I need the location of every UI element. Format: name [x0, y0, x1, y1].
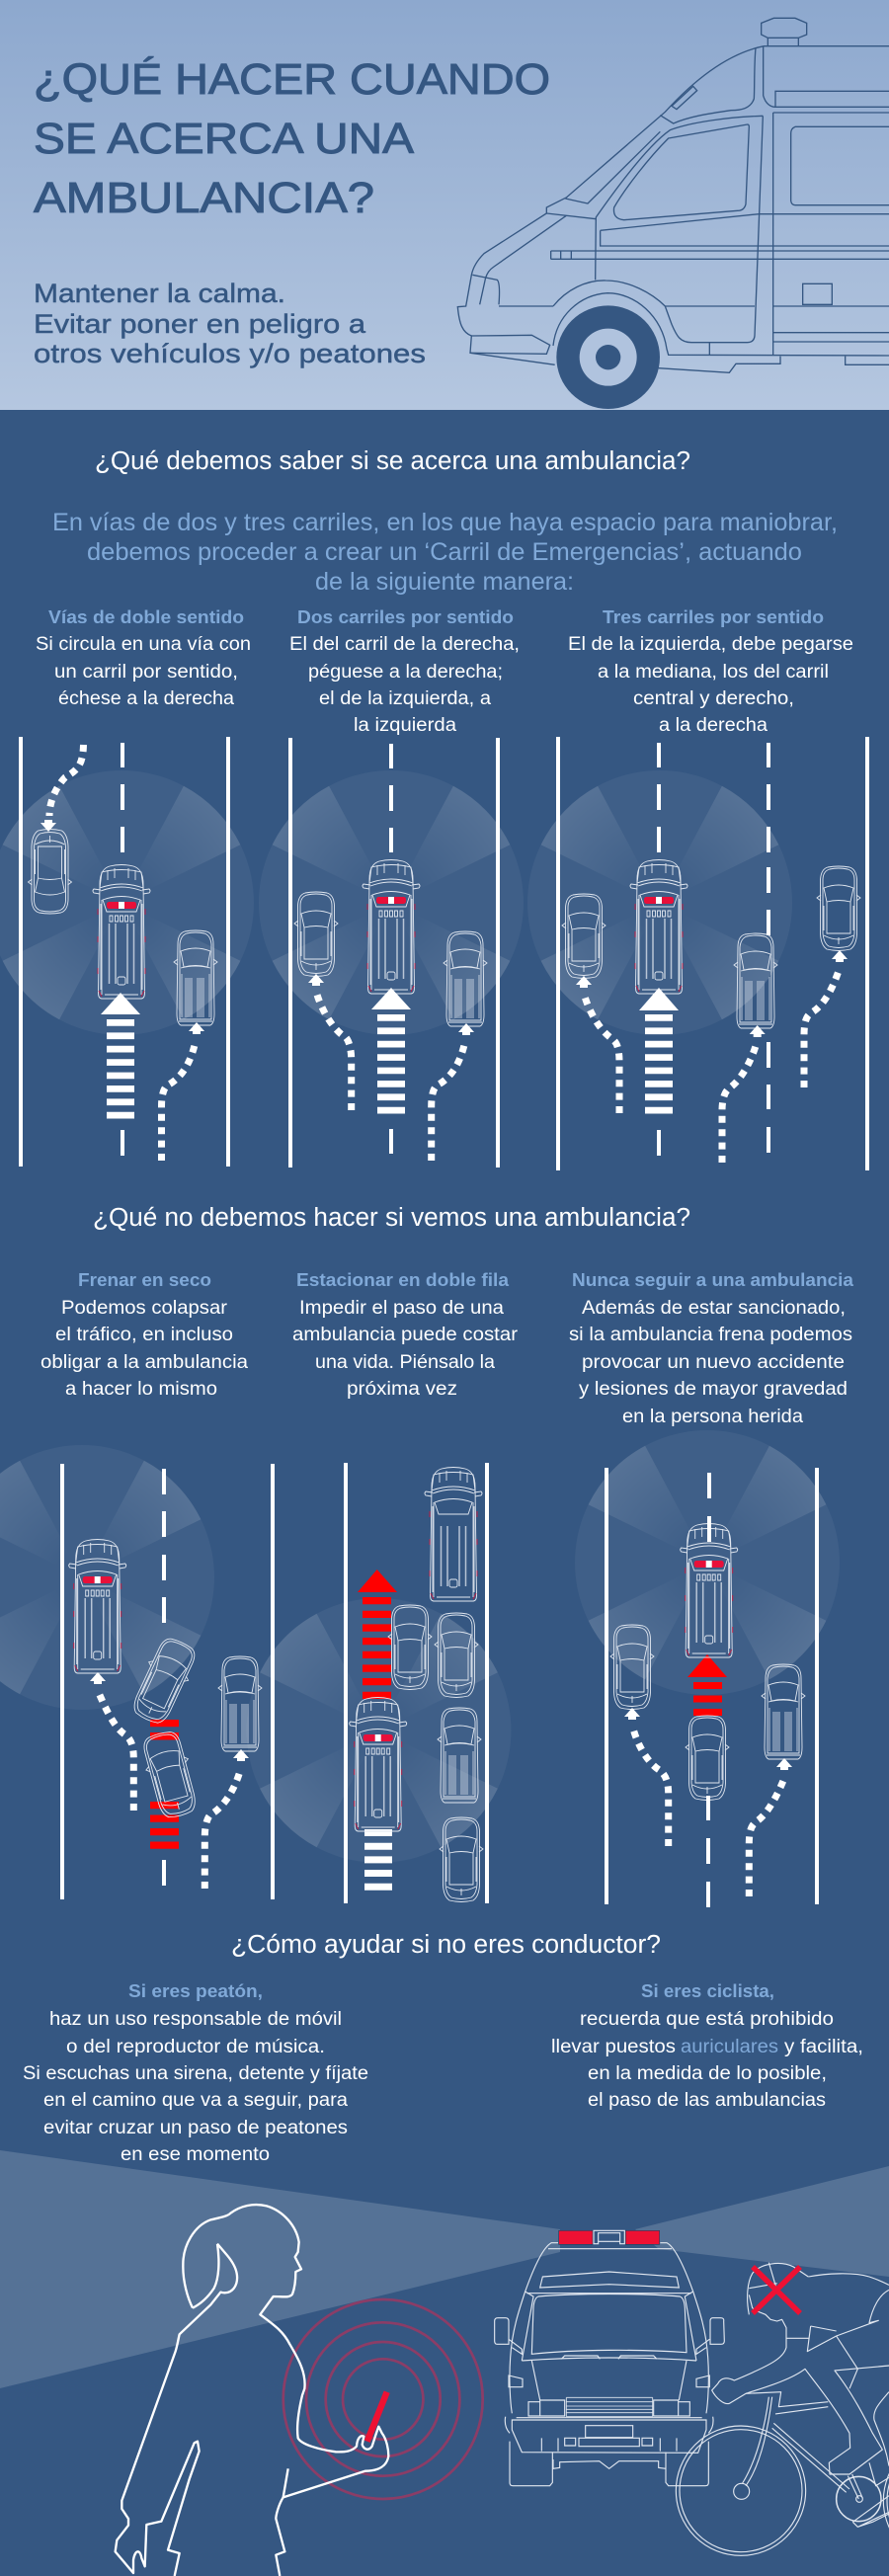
ambulance	[363, 859, 420, 994]
pickup	[218, 1656, 262, 1751]
text: si eres peatón: en ese momento	[121, 2144, 270, 2165]
text: si eres ciclista: en la medida de lo posible,	[588, 2063, 827, 2084]
dotted path right	[204, 1771, 240, 1889]
dotted path right	[749, 1779, 784, 1896]
heading: qué no debemos hacer: ¿Qué no debemos hacer si vemos una ambulancia?	[93, 1204, 690, 1232]
arrow tip	[624, 1708, 640, 1720]
arrow tip	[458, 1023, 474, 1035]
siren glow	[0, 770, 254, 1035]
hatchback left	[610, 1625, 654, 1709]
dotted path left	[49, 745, 83, 816]
diagram: nunca seguir a una ambulancia	[575, 1430, 840, 1907]
text: tres carriles por sentido	[568, 606, 853, 736]
text: frenar en seco: a hacer lo mismo	[65, 1379, 217, 1400]
text: si eres peatón: en el camino que va a seguir, para	[43, 2090, 348, 2111]
arrow tip	[776, 1758, 792, 1770]
subtitle	[34, 279, 426, 368]
diagram: three lanes	[527, 737, 867, 1170]
car moving aside	[28, 830, 71, 914]
text: dos carriles por sentido	[289, 606, 520, 736]
heading: qué debemos saber: ¿Qué debemos saber si se acerca una ambulancia?	[95, 447, 690, 475]
parked van	[425, 1468, 482, 1601]
intro paragraph: de la siguiente manera:	[315, 568, 574, 596]
text: frenar en seco: el tráfico, en incluso	[55, 1325, 233, 1345]
panel: header banner	[0, 0, 889, 410]
dotted path left	[99, 1693, 133, 1811]
text: frenar en seco: obligar a la ambulancia	[40, 1352, 248, 1373]
text: vías de doble sentido: Vías de doble sentido	[48, 606, 244, 627]
text: nunca seguir a una ambulancia: provocar un nuevo accidente	[582, 1352, 845, 1373]
red stripes	[150, 1720, 179, 1849]
text: estacionar en doble fila	[292, 1269, 519, 1400]
arrow tip	[40, 820, 56, 832]
dotted path left	[317, 995, 352, 1110]
text: si eres peatón: o del reproductor de música.	[66, 2037, 325, 2057]
text: si eres ciclista: Si eres ciclista,	[641, 1980, 774, 2001]
text: vías de doble sentido: un carril por sentido,	[54, 662, 238, 683]
icon: side view ambulance	[457, 18, 889, 409]
text: si eres peatón	[23, 1980, 368, 2165]
text: si eres ciclista: llevar puestos	[551, 2037, 676, 2057]
text: si eres ciclista: auriculares	[681, 2037, 778, 2057]
arrow tip	[90, 1672, 106, 1684]
arrow tip	[308, 974, 324, 986]
title: AMBULANCIA?	[34, 174, 374, 222]
text: si eres peatón: Si escuchas una sirena, detente y fíjate	[23, 2063, 368, 2084]
hatchback right	[817, 866, 860, 950]
icon: pedestrian outline	[116, 2205, 388, 2576]
pickup	[762, 1664, 805, 1759]
parked car	[440, 1817, 483, 1902]
text: si eres ciclista: el paso de las ambulancias	[588, 2090, 826, 2111]
diagram: two lanes	[259, 738, 524, 1167]
title	[34, 55, 550, 222]
arrow tip	[832, 950, 848, 962]
arrow tip	[576, 976, 592, 988]
text: nunca seguir a una ambulancia: y lesiones de mayor gravedad	[579, 1379, 848, 1400]
ambulance	[630, 859, 687, 994]
ambulance	[69, 1539, 126, 1673]
text: nunca seguir a una ambulancia: en la persona herida	[622, 1407, 803, 1427]
dotted path right	[432, 1043, 464, 1161]
diagram: estacionar en doble fila	[247, 1463, 512, 1903]
big arrow	[639, 988, 679, 1114]
text: dos carriles por sentido: Dos carriles por sentido	[297, 606, 514, 627]
text: tres carriles por sentido: a la mediana, los del carril	[598, 662, 829, 683]
icon: phone signal rings	[283, 2299, 483, 2499]
pickup	[174, 930, 217, 1025]
light beam left	[0, 2150, 560, 2388]
pickup	[444, 931, 487, 1026]
braking car	[138, 1729, 202, 1821]
icon: crossed out headphones	[753, 2267, 800, 2313]
text: frenar en seco: Frenar en seco	[78, 1269, 211, 1290]
dotted path right	[162, 1043, 196, 1161]
text: nunca seguir a una ambulancia	[569, 1269, 854, 1427]
text: estacionar en doble fila: ambulancia puede costar	[292, 1325, 519, 1345]
text: tres carriles por sentido: Tres carriles por sentido	[603, 606, 824, 627]
text: si eres peatón: Si eres peatón,	[128, 1980, 263, 2001]
dotted path middle	[722, 1046, 756, 1163]
ambulance	[93, 865, 150, 999]
siren glow	[247, 1598, 512, 1863]
siren glow	[527, 770, 792, 1035]
dotted path left	[633, 1729, 669, 1846]
intro paragraph	[52, 509, 838, 596]
parked car	[435, 1613, 478, 1697]
text: nunca seguir a una ambulancia: Además de estar sancionado,	[582, 1298, 846, 1319]
title: ¿QUÉ HACER CUANDO	[34, 55, 550, 104]
text: nunca seguir a una ambulancia: si la ambulancia frena podemos	[569, 1325, 852, 1345]
text: si eres peatón: haz un uso responsable de móvil	[49, 2009, 342, 2030]
icon: cyclist outline	[676, 2263, 889, 2565]
pickup	[734, 933, 777, 1028]
text: si eres peatón: evitar cruzar un paso de peatones	[43, 2118, 348, 2138]
red arrow	[358, 1570, 397, 1699]
subtitle: otros vehículos y/o peatones	[34, 339, 426, 368]
red arrow	[687, 1654, 727, 1716]
text: tres carriles por sentido: a la derecha	[659, 715, 768, 736]
siren glow	[259, 770, 524, 1035]
text: si eres ciclista: y facilita,	[784, 2037, 863, 2057]
intro paragraph: debemos proceder a crear un ‘Carril de Emergencias’, actuando	[87, 538, 802, 566]
diagram: single lane each way	[0, 737, 254, 1167]
icon: front view ambulance	[495, 2230, 724, 2486]
icon: phone	[367, 2392, 387, 2442]
hatchback	[294, 892, 338, 976]
text: dos carriles por sentido: El del carril de la derecha,	[289, 634, 520, 655]
text: vías de doble sentido: Si circula en una vía con	[36, 634, 251, 655]
text: dos carriles por sentido: el de la izquierda, a	[319, 688, 491, 709]
ambulance	[681, 1523, 738, 1657]
text: frenar en seco: Podemos colapsar	[61, 1298, 228, 1319]
subtitle: Mantener la calma.	[34, 279, 285, 308]
subtitle: Evitar poner en peligro a	[34, 309, 366, 339]
text: si eres ciclista	[551, 1980, 863, 2111]
text: estacionar en doble fila: Impedir el paso de una	[299, 1298, 504, 1319]
arrow tip	[189, 1022, 204, 1034]
parked pickup	[438, 1708, 481, 1803]
text: dos carriles por sentido: la izquierda	[354, 715, 456, 736]
white stripes	[364, 1829, 392, 1891]
dotted path right	[804, 971, 839, 1087]
text: tres carriles por sentido: El de la izquierda, debe pegarse	[568, 634, 853, 655]
dotted path left	[585, 997, 619, 1113]
text: nunca seguir a una ambulancia: Nunca seguir a una ambulancia	[572, 1269, 854, 1290]
text: vías de doble sentido	[36, 606, 251, 709]
text: tres carriles por sentido: central y derecho,	[633, 688, 794, 709]
title: SE ACERCA UNA	[34, 115, 415, 163]
following car	[686, 1716, 729, 1800]
ambulance	[350, 1697, 407, 1831]
intro paragraph: En vías de dos y tres carriles, en los que haya espacio para maniobrar,	[52, 509, 838, 536]
text: si eres ciclista: recuerda que está prohibido	[580, 2009, 834, 2030]
hatchback	[562, 894, 606, 978]
text: estacionar en doble fila: Estacionar en doble fila	[296, 1269, 510, 1290]
tilted car	[126, 1634, 202, 1729]
text: dos carriles por sentido: péguese a la derecha;	[308, 662, 503, 683]
arrow tip	[750, 1025, 766, 1037]
diagram: frenar en seco	[0, 1445, 273, 1899]
arrow tip	[233, 1749, 249, 1761]
double parked car	[388, 1605, 432, 1689]
big arrow	[371, 988, 411, 1114]
siren glow	[0, 1445, 214, 1710]
text: estacionar en doble fila: próxima vez	[347, 1379, 457, 1400]
light beam right	[635, 2166, 889, 2277]
text: vías de doble sentido: échese a la derecha	[58, 688, 234, 709]
text: estacionar en doble fila: una vida. Piénsalo la	[315, 1352, 495, 1373]
text: frenar en seco	[40, 1269, 248, 1400]
heading: cómo ayudar: ¿Cómo ayudar si no eres conductor?	[231, 1931, 661, 1959]
siren glow	[575, 1430, 840, 1695]
big arrow	[101, 993, 140, 1118]
